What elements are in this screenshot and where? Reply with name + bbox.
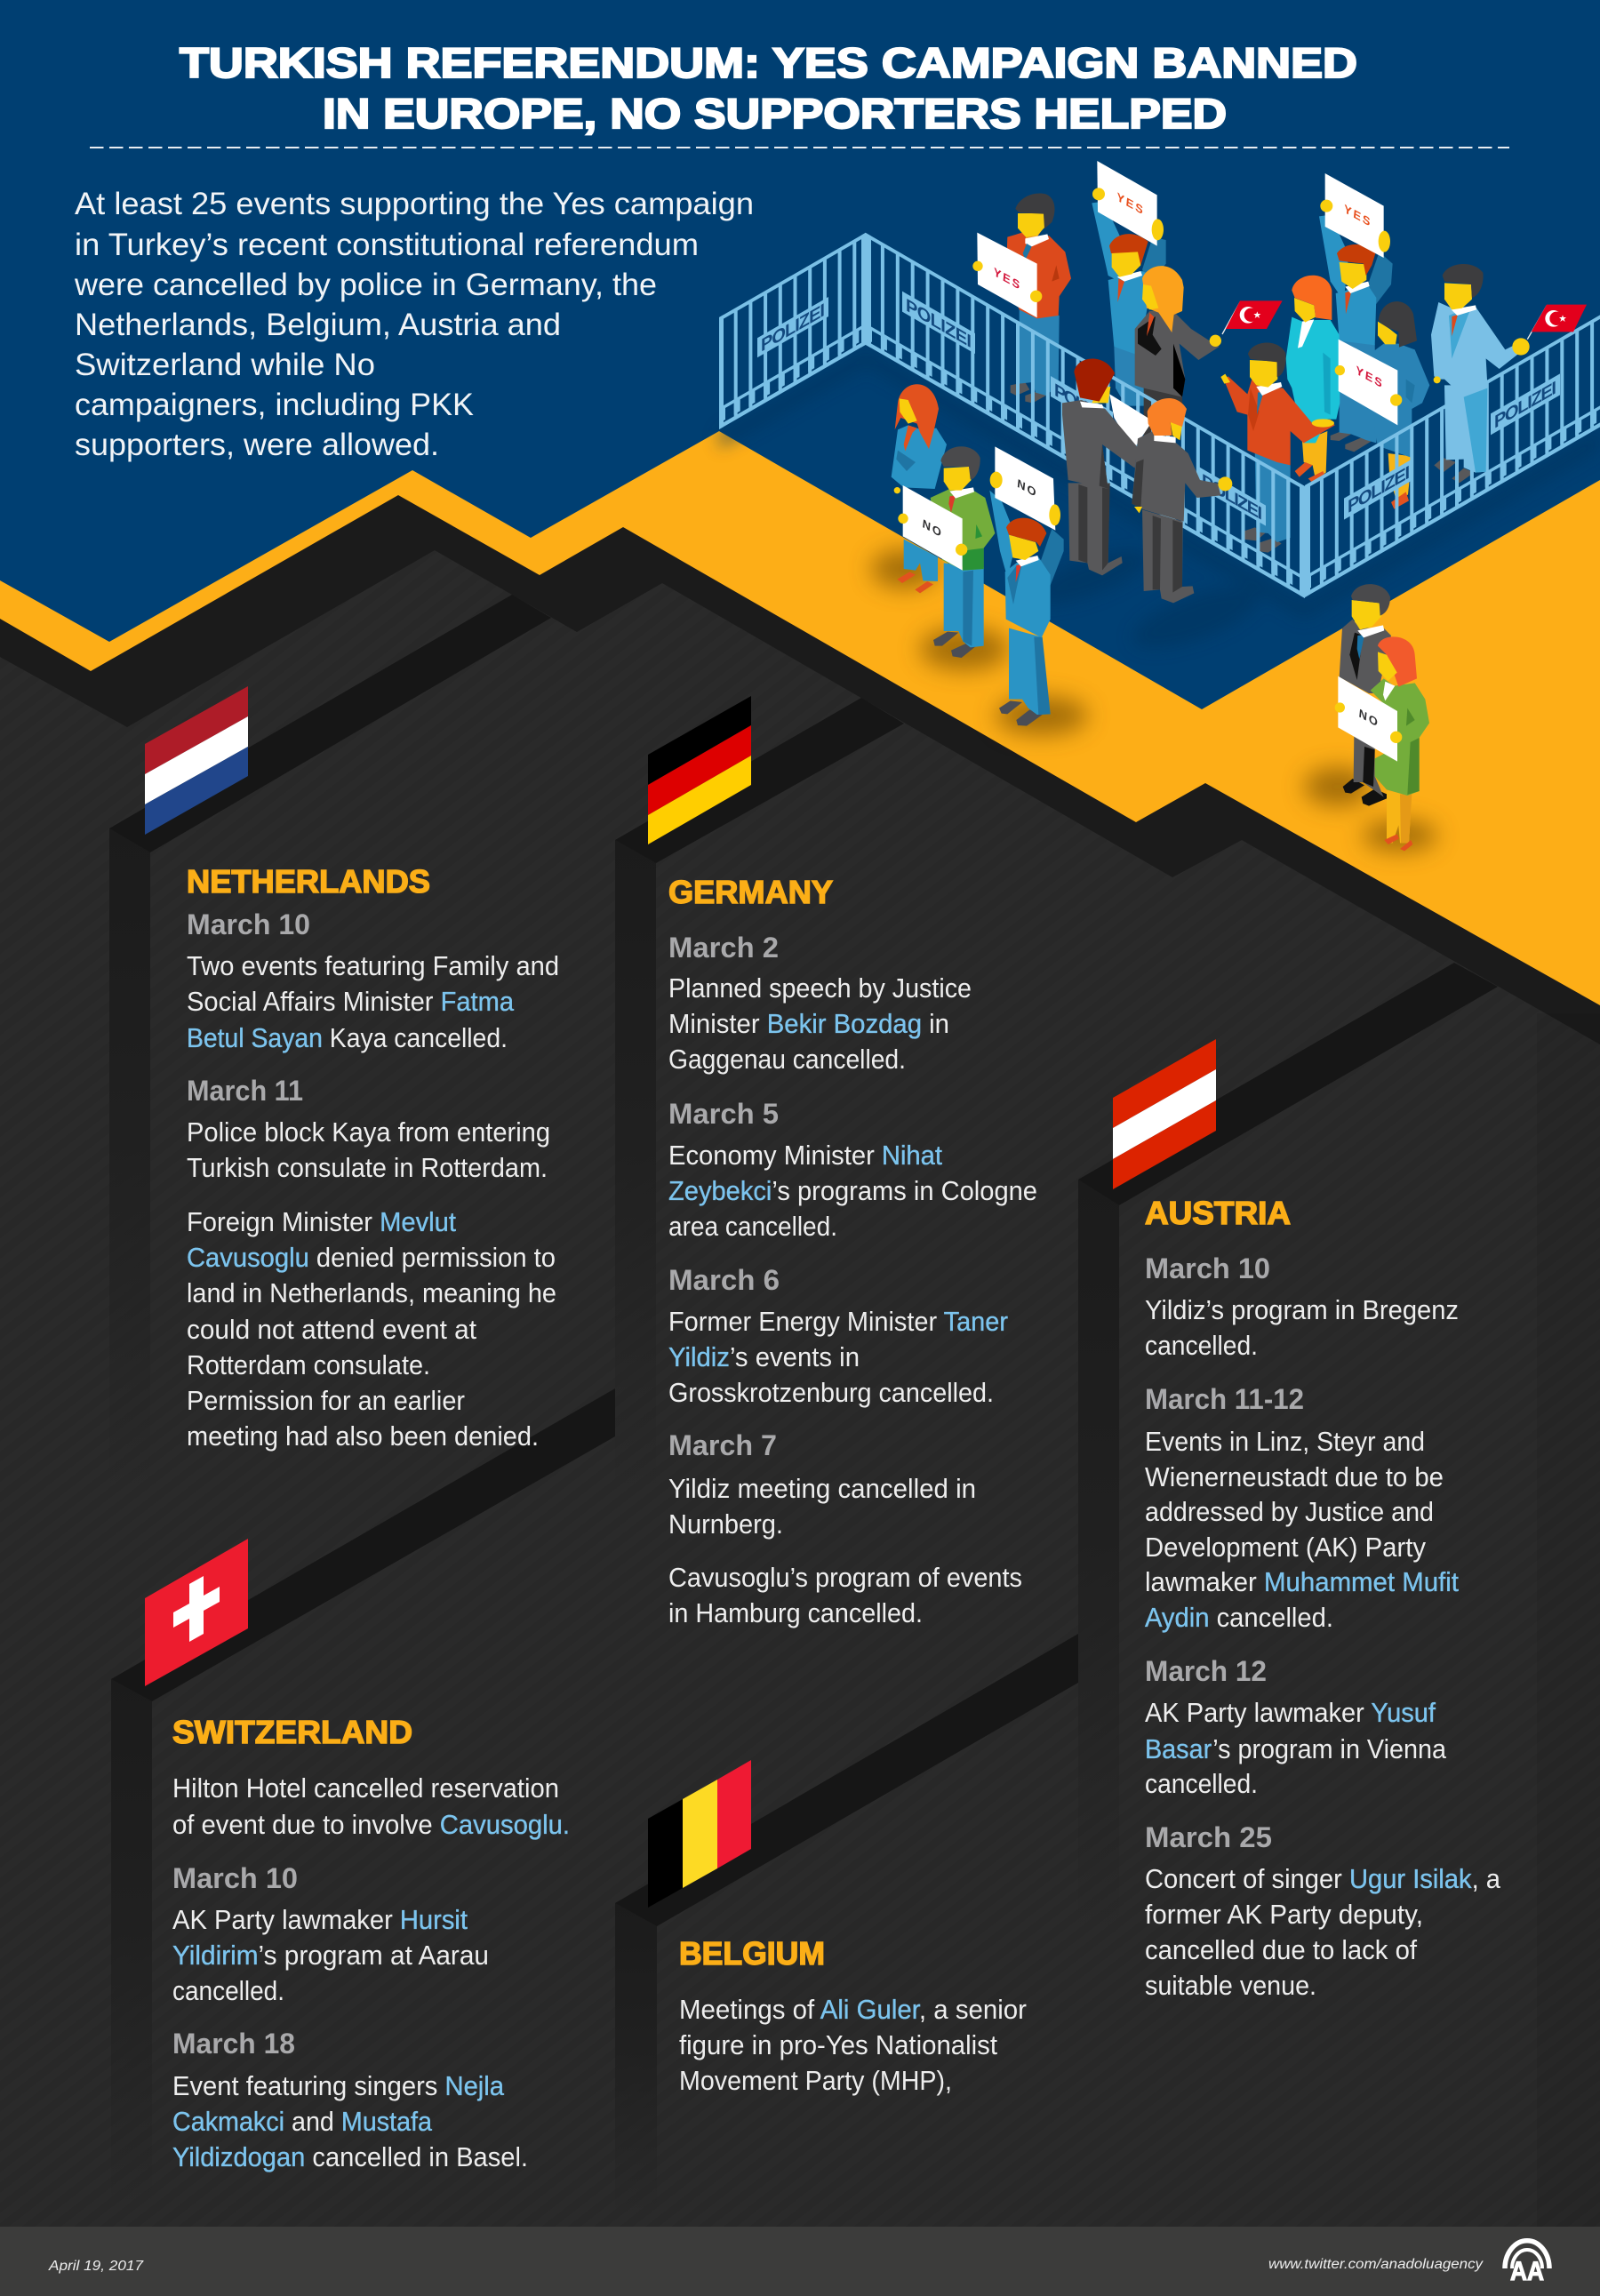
heading: Germany: GERMANY [668, 874, 833, 910]
background: blue sky panel [0, 0, 1600, 1067]
entry: Meetings of Ali Guler: figure in pro-Yes Nationalist [679, 2030, 998, 2060]
entry: Foreign Minister paragraph [187, 1207, 556, 1452]
fence: right section: POLIZEI [1348, 460, 1410, 517]
background: dark outer band [0, 495, 1600, 2227]
entry: March 12: cancelled. [1145, 1769, 1258, 1799]
entry: March 10: Yildirim’s program at Aarau [172, 1940, 489, 1971]
person: blue suit man raising NO sign [989, 446, 1064, 726]
title [180, 39, 1357, 137]
footer bar [0, 2227, 1600, 2296]
entry: March 25: March 25 [1145, 1821, 1272, 1853]
entry: Foreign Minister paragraph: Permission for an earlier [187, 1386, 465, 1416]
entry: March 6 [668, 1264, 1008, 1408]
entry: March 5: Zeybekci’s programs in Cologne [668, 1176, 1037, 1206]
shadows on blue floor [719, 348, 1600, 660]
fence: left back section [719, 233, 866, 429]
entry: Meetings of Ali Guler [679, 1995, 1027, 2096]
entry: March 11-12: Development (AK) Party [1145, 1532, 1427, 1563]
heading: Switzerland: SWITZERLAND [172, 1714, 412, 1750]
heading: Belgium: BELGIUM [679, 1935, 825, 1972]
title: TURKISH REFERENDUM: YES CAMPAIGN BANNED [180, 39, 1357, 86]
ledge and side strip: Switzerland [111, 1388, 615, 2222]
heading: Netherlands: NETHERLANDS [187, 863, 430, 900]
intro text block: Netherlands, Belgium, Austria and [75, 308, 561, 342]
entry: March 2: Planned speech by Justice [668, 973, 972, 1004]
entry: March 11: Police block Kaya from entering [187, 1117, 550, 1148]
fence: left back section: POLIZEI [761, 299, 825, 356]
entry: March 10: cancelled. [1145, 1331, 1258, 1361]
entry: March 25: suitable venue. [1145, 1971, 1316, 2001]
entry: March 11-12: Wienerneustadt due to be [1145, 1462, 1444, 1492]
entry: March 10: March 10 [1145, 1252, 1270, 1284]
person: woman in grey suit waving Turkish flag [1135, 266, 1283, 436]
entry: March 25: former AK Party deputy, [1145, 1900, 1423, 1930]
entry: March 10: AK Party lawmaker Hursit [172, 1905, 468, 1935]
ledge and side strip: Belgium [615, 1634, 1078, 2222]
entry: March 5: March 5 [668, 1098, 779, 1130]
fence: long diagonal section: POLIZEI [906, 293, 972, 352]
entry: March 10 [172, 1862, 489, 2006]
people: couple with NO sign on yellow floor: NO [1358, 707, 1380, 730]
flag: Netherlands [145, 686, 248, 835]
entry: March 5 [668, 1098, 1037, 1242]
entry: March 2: Gaggenau cancelled. [668, 1044, 906, 1075]
entry: March 12 [1145, 1655, 1446, 1799]
entry: March 10: March 10 [187, 908, 310, 940]
flag: Austria [1113, 1039, 1216, 1189]
ledge and side strip: Netherlands [109, 595, 551, 1511]
title: IN EUROPE, NO SUPPORTERS HELPED [323, 90, 1227, 137]
panel: Germany [648, 696, 1037, 1628]
intro text block [74, 187, 754, 462]
entry: Foreign Minister paragraph: Rotterdam consulate. [187, 1350, 430, 1380]
panel: Netherlands [145, 686, 559, 1452]
intro text block: supporters, were allowed. [75, 428, 439, 462]
entry: March 2: Minister Bekir Bozdag in [668, 1009, 949, 1039]
entry: Hilton Hotel: Hilton Hotel cancelled reservation [172, 1773, 559, 1804]
entry: March 18 [172, 2028, 528, 2172]
entry: March 25: Concert of singer Ugur Isilak, a [1145, 1864, 1500, 1894]
entry: March 12: AK Party lawmaker Yusuf [1145, 1698, 1436, 1728]
intro text block: campaigners, including PKK [75, 388, 474, 422]
entry: March 18: Yildizdogan cancelled in Basel. [172, 2142, 528, 2172]
person: red jacket man behind fence corner [1220, 343, 1335, 553]
person: teal suit woman [1286, 276, 1340, 483]
entry: Foreign Minister paragraph: land in Netherlands, meaning he [187, 1278, 556, 1308]
person: blue suit raising YES sign, right: YES [1343, 202, 1372, 229]
entry: March 7: Yildiz meeting cancelled in [668, 1474, 976, 1504]
person: blue suit raising YES sign, left [1092, 161, 1166, 406]
entry: March 12: Basar’s program in Vienna [1145, 1734, 1446, 1764]
entry: March 10 [187, 908, 559, 1053]
entry: March 11 [187, 1075, 550, 1183]
entry: March 6: Former Energy Minister Taner [668, 1307, 1008, 1337]
flag: Switzerland [145, 1539, 248, 1686]
heading: Austria: AUSTRIA [1145, 1195, 1291, 1231]
entry: March 5: Economy Minister Nihat [668, 1140, 943, 1171]
person: blue suit raising YES sign, left: YES [1116, 190, 1145, 218]
entry: March 18: March 18 [172, 2028, 295, 2060]
entry: March 10: Social Affairs Minister Fatma [187, 987, 514, 1017]
entry: March 11-12: addressed by Justice and [1145, 1497, 1434, 1527]
entry: Hilton Hotel [172, 1773, 570, 1840]
background: textured dark panel [0, 550, 1600, 2227]
person: green jacket man holding NO sign: NO [922, 517, 943, 540]
dashed divider under title [90, 147, 1509, 148]
person: red jacket holding YES sign behind fence: YES [993, 265, 1022, 292]
source link: www.twitter.com/anadoluagency [1268, 2257, 1484, 2272]
person: blue jacket woman holding YES sign [1335, 301, 1429, 509]
entry: March 2 [668, 932, 972, 1075]
entry: March 11-12: March 11-12 [1145, 1383, 1304, 1415]
ledge and side strip: Austria [1078, 963, 1498, 1956]
entry: Meetings of Ali Guler: Movement Party (MHP), [679, 2066, 952, 2096]
entry: March 11-12 [1145, 1383, 1459, 1633]
entry: Meetings of Ali Guler: Meetings of Ali Guler, a senior [679, 1995, 1027, 2025]
entry: March 10: cancelled. [172, 1976, 284, 2006]
flag: Germany [648, 696, 751, 844]
entry: March 18: Event featuring singers Nejla [172, 2071, 504, 2101]
entry: March 5: area cancelled. [668, 1212, 837, 1242]
panel: Switzerland [145, 1539, 570, 2172]
entry: March 25: cancelled due to lack of [1145, 1935, 1418, 1965]
icon: Anadolu Agency logo: AA [1510, 2257, 1544, 2286]
feet of light blue man [1434, 458, 1474, 483]
entry: March 11-12: Aydin cancelled. [1145, 1603, 1333, 1633]
person: light blue suit man with Turkish flag [1431, 264, 1587, 473]
entry: Foreign Minister paragraph: meeting had also been denied. [187, 1421, 539, 1452]
intro text block: were cancelled by police in Germany, the [74, 268, 657, 302]
entry: Foreign Minister paragraph: Cavusoglu denied permission to [187, 1243, 556, 1273]
entry: Hilton Hotel: of event due to involve Cavusoglu. [172, 1810, 570, 1840]
entry: March 25 [1145, 1821, 1500, 2001]
person: blue jacket woman holding YES sign: YES [1356, 364, 1384, 391]
entry: March 6: March 6 [668, 1264, 780, 1296]
entry: March 10: March 10 [172, 1862, 298, 1894]
ledge and side strip: Germany [615, 698, 904, 1511]
entry: March 2: March 2 [668, 932, 779, 964]
flag: Belgium [648, 1760, 751, 1908]
entry: Cavusoglu program: Cavusoglu’s program of events [668, 1563, 1022, 1593]
entry: March 10: Betul Sayan Kaya cancelled. [187, 1023, 508, 1053]
people: couple with NO sign on yellow floor [1335, 584, 1429, 851]
intro text block: Switzerland while No [75, 348, 375, 382]
fence: right section [1305, 315, 1600, 597]
person: blue suit raising YES sign, right [1319, 173, 1393, 452]
person: blue suit man raising NO sign: NO [1017, 476, 1038, 500]
shadows on yellow floor [871, 549, 1437, 852]
entry: March 11: March 11 [187, 1075, 303, 1107]
fence: long diagonal section: POLIZEI [1054, 379, 1109, 431]
entry: March 11-12: lawmaker Muhammet Mufit [1145, 1567, 1459, 1597]
intro text block: in Turkey’s recent constitutional referendum [75, 228, 699, 262]
person: grey suit man with back to viewer, maroon hair [1062, 359, 1153, 575]
fence: long diagonal section: POLIZEI [1202, 469, 1262, 524]
entry: March 6: Grosskrotzenburg cancelled. [668, 1378, 994, 1408]
entry: March 7: Nurnberg. [668, 1509, 783, 1540]
entry: March 7: March 7 [668, 1429, 777, 1461]
person: red haired woman in blue suit [892, 384, 947, 593]
entry: Cavusoglu program [668, 1563, 1022, 1628]
entry: Foreign Minister paragraph: Foreign Minister Mevlut [187, 1207, 456, 1237]
entry: March 6: Yildiz’s events in [668, 1342, 860, 1372]
person: grey suit man with back to viewer, orange hair [1132, 398, 1232, 603]
entry: March 10 [1145, 1252, 1459, 1361]
entry: March 11-12: Events in Linz, Steyr and [1145, 1427, 1425, 1457]
fence: long diagonal section [866, 233, 1305, 598]
panel: Belgium [648, 1760, 1027, 2096]
background: yellow isometric floor [0, 431, 1600, 1156]
entry: March 11: Turkish consulate in Rotterdam. [187, 1153, 548, 1183]
person: red jacket holding YES sign behind fence [972, 193, 1071, 403]
entry: March 10: Two events featuring Family and [187, 951, 559, 981]
person: green jacket man holding NO sign [898, 446, 995, 658]
entry: Foreign Minister paragraph: could not attend event at [187, 1315, 477, 1345]
entry: March 10: Yildiz’s program in Bregenz [1145, 1295, 1459, 1325]
entry: March 18: Cakmakci and Mustafa [172, 2107, 432, 2137]
panel: Austria [1113, 1039, 1500, 2001]
illustration: protest scene with fence and people [719, 161, 1600, 852]
fence: right section: POLIZEI [1494, 376, 1556, 433]
icon: Anadolu Agency logo [1505, 2241, 1549, 2286]
entry: March 12: March 12 [1145, 1655, 1267, 1687]
intro text block: At least 25 events supporting the Yes campaign [75, 187, 754, 221]
date: April 19, 2017 [48, 2259, 145, 2274]
entry: Cavusoglu program: in Hamburg cancelled. [668, 1598, 923, 1628]
entry: March 7 [668, 1429, 976, 1540]
